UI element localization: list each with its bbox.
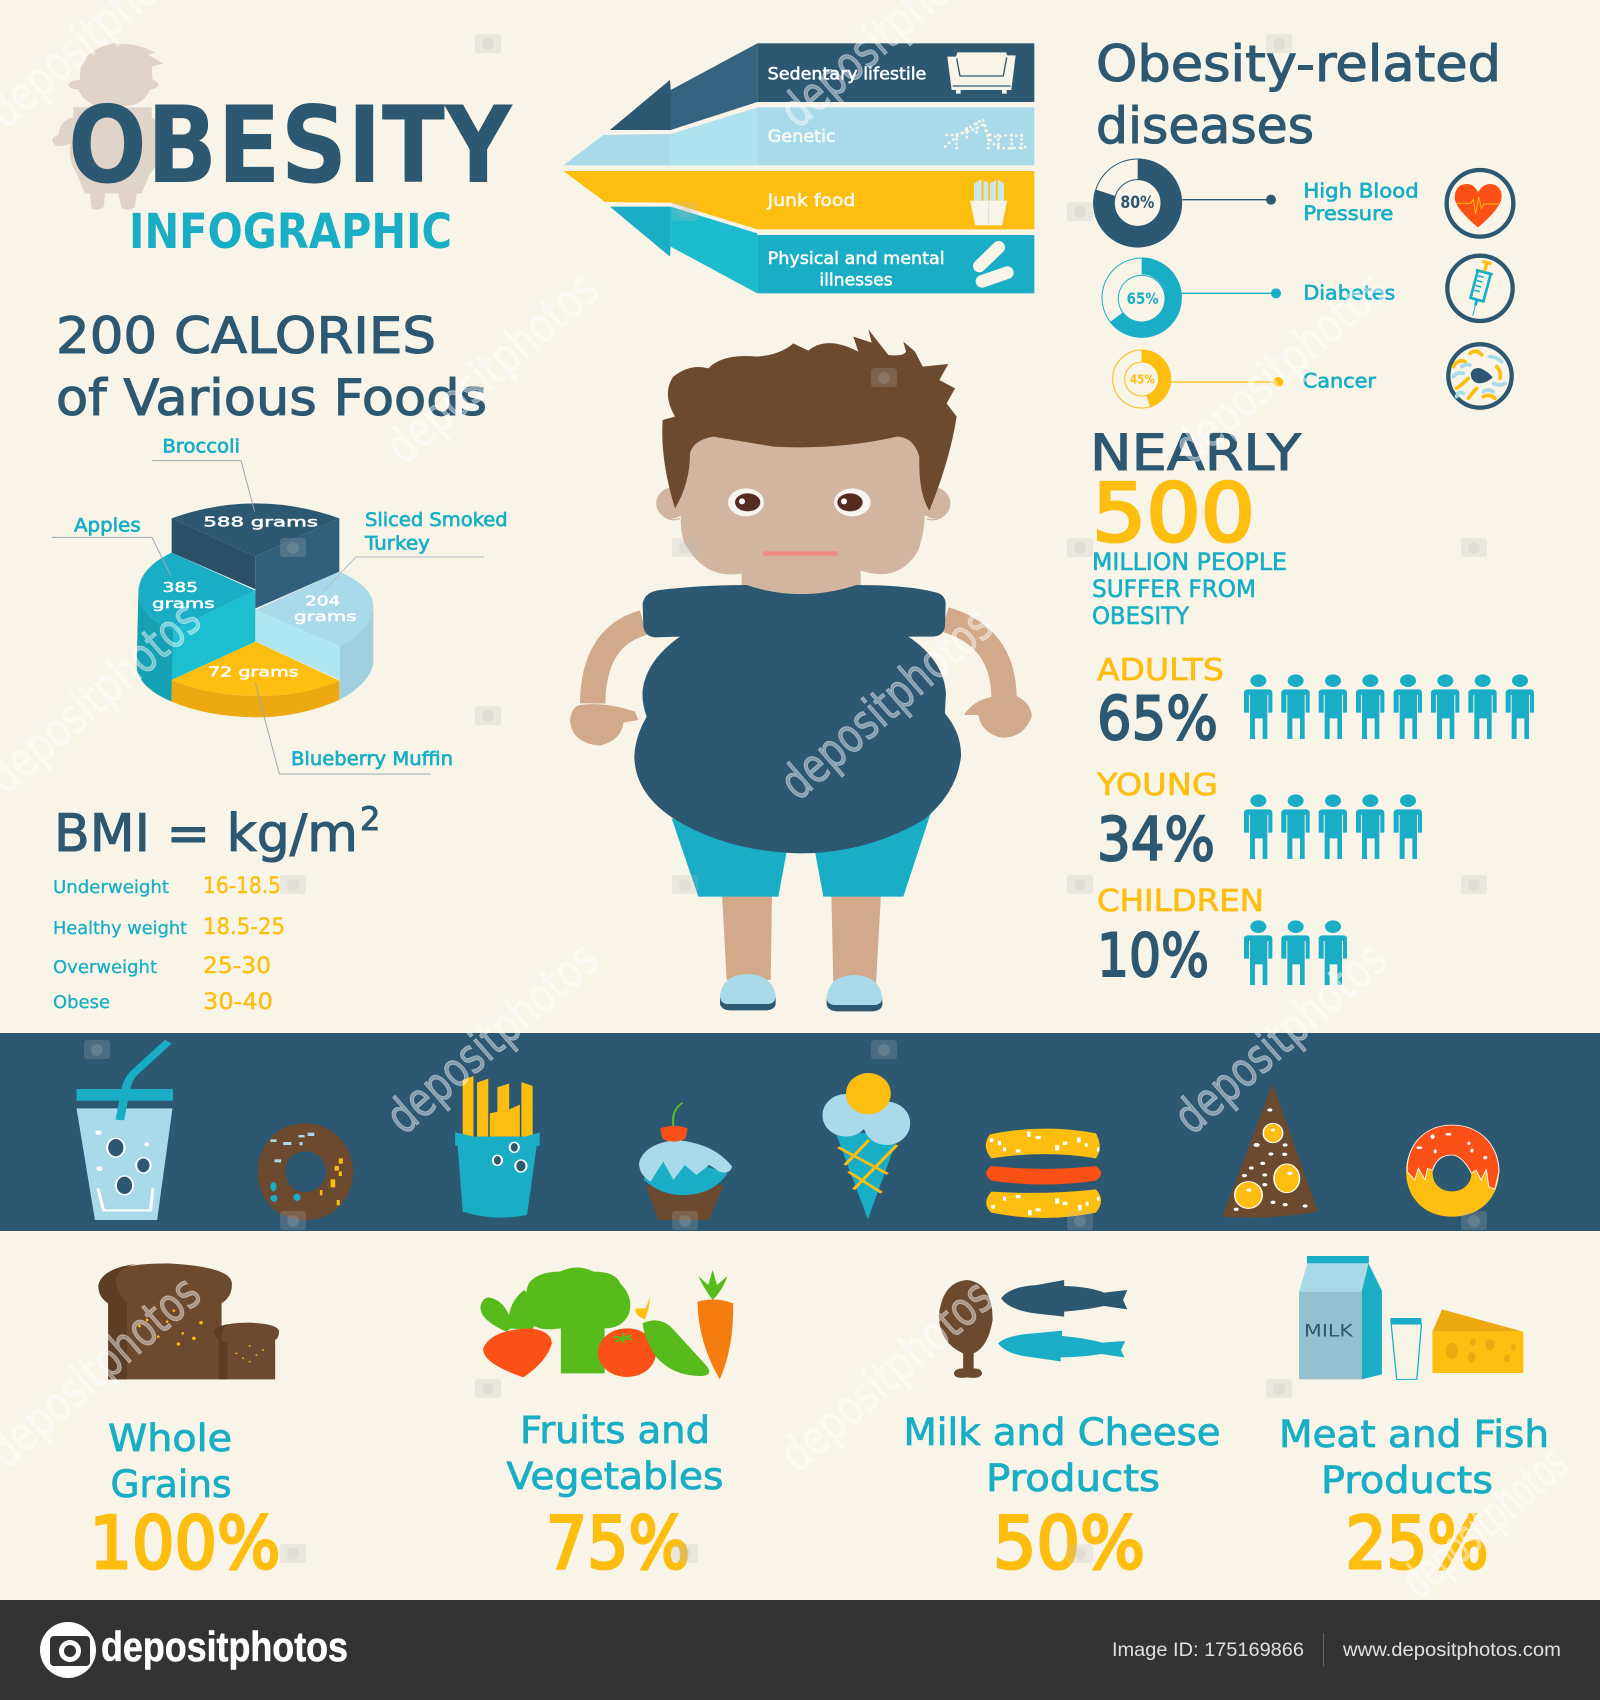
BMI table: 18.5-25 [203,915,285,940]
watermarks: depositphotos [375,931,610,1145]
slice: apples [137,553,255,702]
stat: nearly 500 million people: 500 [1092,467,1255,560]
icon: syringe [1447,256,1513,321]
icon: sofa [947,52,1016,94]
arrow: physical and mental illnesses: illnesses [819,270,893,289]
title: OBESITY [68,84,513,207]
donut: 80% [1093,159,1182,247]
face [681,430,925,600]
BMI table: 30-40 [203,990,273,1015]
label: sliced smoked turkey: Turkey [364,533,430,554]
food group: meat and fish products: Products [1321,1459,1493,1502]
food group: whole grains: Grains [110,1463,232,1506]
icon: meat and fish [939,1280,1127,1378]
heading: obesity-related diseases: diseases [1096,97,1314,155]
row: cancer [1113,344,1512,408]
slice: sliced smoked turkey: 204 [305,594,340,609]
slice: apples: grams [152,597,215,612]
food group: meat and fish products [1279,1413,1549,1585]
heading: obesity-related diseases: Obesity-related [1096,35,1501,93]
stat: nearly 500 million people: OBESITY [1092,602,1189,630]
icon: DNA strand [945,119,1027,150]
label: blueberry muffin: Blueberry Muffin [291,749,453,770]
heading: obesity-related diseases [1096,35,1501,155]
people row: young [1244,794,1422,859]
watermark camera marks [84,34,1487,1563]
footer logo [40,1622,348,1678]
stat: nearly 500 million people: MILLION PEOPLE [1092,548,1287,576]
stat: nearly 500 million people [1090,424,1302,630]
food group: fruits and vegetables [506,1409,724,1585]
food group: whole grains: 100% [90,1501,280,1585]
stat: young 34%: YOUNG [1096,768,1218,803]
icon: heart [1447,170,1513,237]
food group: meat and fish products: 25% [1346,1501,1488,1585]
shoes [720,974,882,1011]
row: high blood pressure: High Blood [1303,179,1419,202]
slice: blueberry muffin: 72 grams [208,666,299,681]
BMI table: Underweight [53,877,169,898]
icon: whole grain breads [98,1263,279,1379]
arrow: junk food: Junk food [767,191,855,210]
label: apples [52,515,171,575]
donut: 80%: 80% [1120,193,1155,212]
cheese [1432,1309,1523,1373]
ears [656,487,951,520]
stat: adults 65%: 65% [1097,684,1218,754]
donut: 65%: 65% [1127,289,1159,308]
milk carton: MILK [1304,1322,1353,1341]
watermarks: depositphotos [769,1269,1004,1483]
BMI formula: BMI = kg/m [54,804,358,864]
footer credits: www.depositphotos.com [1342,1639,1561,1661]
footer bar [0,1600,1600,1700]
food group: milk and cheese products: Products [986,1457,1160,1500]
row: cancer: Cancer [1303,370,1376,393]
people row: children [1244,920,1347,985]
fish, teal [998,1331,1125,1361]
donut: 65% [1102,258,1182,338]
icon: sandwich [986,1129,1101,1218]
heading: 200 calories [56,307,487,427]
row: high blood pressure: Pressure [1303,202,1393,225]
food group: whole grains: Whole [108,1417,232,1460]
icon: fruits and vegetables [480,1267,733,1379]
greens and broccoli [480,1267,630,1373]
stat: nearly 500 million people: SUFFER FROM [1092,575,1256,603]
people row: adults [1244,674,1534,739]
icon: pills [979,247,1007,281]
band: junk food [0,1033,1600,1231]
food group: fruits and vegetables: 75% [546,1501,690,1585]
food group: milk and cheese products: 50% [993,1501,1145,1585]
arrow: genetic [563,107,1034,165]
food group: milk and cheese products: Milk and Cheese [904,1411,1220,1454]
icon: ice cream cone [822,1073,910,1219]
icon: chocolate donut [258,1123,353,1220]
boy: head [656,329,957,600]
row: high blood pressure [1093,159,1513,247]
arrow: genetic: Genetic [768,127,836,146]
junk food icons, left half [77,1042,732,1220]
label: broccoli [152,437,255,512]
stat: children 10%: 10% [1097,921,1209,991]
label: apples: Apples [74,515,141,536]
food group: meat and fish products: Meat and Fish [1279,1413,1549,1456]
pie chart: 200 calories of foods [52,437,508,774]
donut: 45%: 45% [1130,372,1155,387]
stat: nearly 500 million people: NEARLY [1090,424,1302,482]
icon: fries [970,179,1007,225]
row: diabetes: Diabetes [1303,282,1395,305]
milk carton [1299,1256,1382,1379]
label: blueberry muffin [255,683,453,774]
heading: 200 calories: 200 CALORIES [56,307,436,365]
label: sliced smoked turkey [323,510,508,591]
mouth [763,551,837,556]
food group: fruits and vegetables: Fruits and [520,1409,710,1452]
fish, dark [1001,1280,1127,1317]
icon: pizza slice [1222,1083,1318,1218]
icon: milk and cheese [1299,1256,1523,1379]
footer credits: Image ID: 175169866 [1112,1639,1304,1661]
tomato [598,1328,656,1377]
BMI table: Overweight [53,957,157,978]
footer logo: depositphotos [101,1623,348,1670]
slice: broccoli: 588 grams [203,516,318,531]
BMI table: 25-30 [203,954,271,979]
footer credits [1112,1633,1561,1666]
stat: young 34%: 34% [1097,805,1215,875]
arrow: sedentary lifestyle [610,43,1034,130]
arrow: sedentary lifestyle: Sedentary lifestile [768,64,926,83]
BMI table: 16-18.5 [203,874,281,899]
watermarks: depositphotos [1163,931,1398,1145]
stat: young 34% [1096,768,1422,875]
BMI table [53,874,285,1015]
causes arrows [563,43,1034,293]
cucumber [643,1320,709,1376]
milk glass [1390,1318,1421,1379]
label: sliced smoked turkey: Sliced Smoked [365,510,508,531]
stat: adults 65%: ADULTS [1097,653,1224,688]
BMI table: Obese [53,992,110,1013]
arrow: junk food [563,171,1034,229]
donut: 45% [1113,350,1171,408]
stat: children 10% [1097,884,1347,991]
food group: whole grains [90,1417,280,1585]
watermarks: depositphotos [769,597,1004,811]
food group: fruits and vegetables: Vegetables [506,1455,724,1498]
arrow: physical and mental illnesses [610,207,1034,293]
icon: drink cup [77,1042,173,1220]
icon: glazed donut [1406,1125,1499,1217]
silhouette: boy behind title [52,43,163,210]
junk food icons, right half [822,1073,1499,1219]
BMI formula: 2 [360,800,380,838]
slice: blueberry muffin [172,642,339,717]
title [68,84,513,260]
stat: adults 65% [1097,653,1534,754]
watermarks: depositphotos [375,261,610,475]
title: INFOGRAPHIC [129,204,452,260]
boy: body [570,585,1032,1011]
icon: cupcake [639,1103,732,1220]
eyes [728,488,871,516]
slice: sliced smoked turkey: grams [294,610,357,625]
arrow: physical and mental illnesses: Physical and mental [768,249,945,268]
stat: children 10%: CHILDREN [1097,884,1264,919]
icon: cancer cell [1448,344,1512,408]
hair [662,329,957,511]
shorts [672,813,931,897]
slice: apples: 385 [163,581,198,596]
panel: obesity-related diseases [1093,159,1513,408]
watermarks: depositphotos [1163,261,1398,475]
carrot [697,1300,733,1379]
label: broccoli: Broccoli [162,437,240,458]
heading: 200 calories: of Various Foods [56,369,487,427]
icon: french fries [455,1076,540,1218]
BMI table: Healthy weight [53,918,187,939]
legs [722,893,881,983]
arms [570,619,1032,746]
shirt [634,585,961,853]
drumstick [939,1280,993,1378]
slice: broccoli [172,503,339,608]
row: diabetes [1102,256,1513,338]
food group: milk and cheese products [904,1411,1220,1585]
red beet [483,1328,552,1377]
slice: sliced smoked turkey [255,572,373,700]
